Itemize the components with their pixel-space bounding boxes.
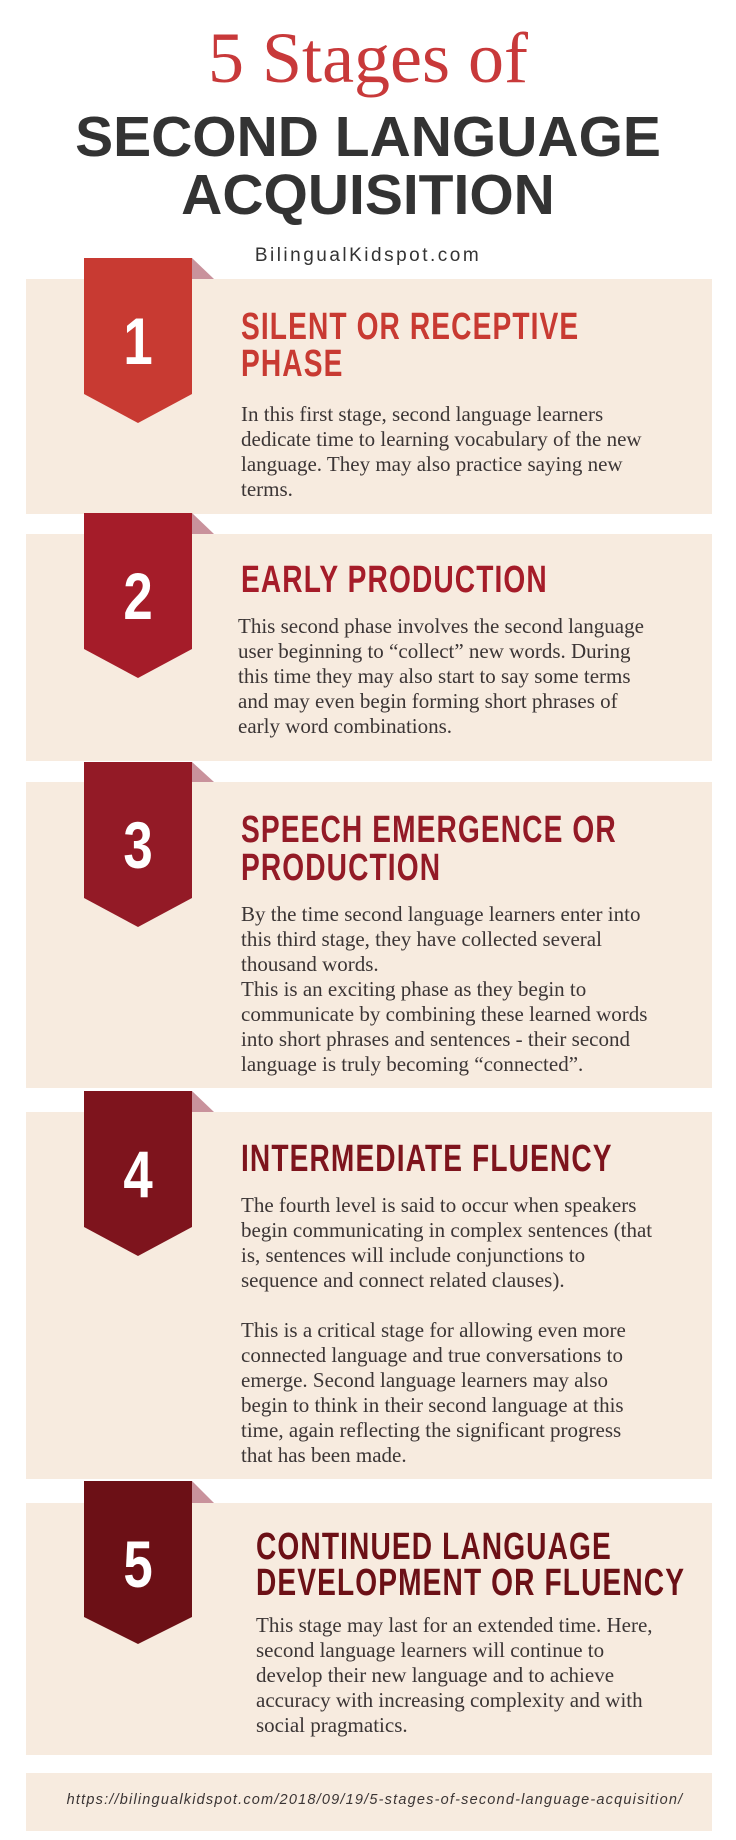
ribbon 1 bbox=[84, 258, 214, 423]
ribbon 3: 3 bbox=[123, 808, 153, 882]
ribbon 1: 1 bbox=[123, 304, 153, 378]
heading 4: INTERMEDIATE FLUENCY bbox=[241, 1138, 613, 1180]
title: second language acquisition: SECOND LANGUAGE bbox=[75, 105, 661, 169]
body 2: user beginning to “collect” new words. During bbox=[238, 639, 630, 663]
body 5: develop their new language and to achieve bbox=[256, 1663, 614, 1687]
ribbon 5 bbox=[84, 1481, 214, 1644]
body 3: into short phrases and sentences - their second bbox=[241, 1027, 630, 1051]
heading 3 bbox=[241, 809, 617, 889]
body 1: terms. bbox=[241, 477, 293, 501]
panel: stage 2 bbox=[26, 534, 712, 761]
ribbon 4 bbox=[84, 1091, 214, 1256]
heading 3: SPEECH EMERGENCE OR bbox=[241, 809, 617, 851]
body 5: This stage may last for an extended time. Here, bbox=[256, 1613, 653, 1637]
panel: stage 1 bbox=[26, 279, 712, 514]
body 4: connected language and true conversations to bbox=[241, 1343, 623, 1367]
body 5: social pragmatics. bbox=[256, 1713, 408, 1737]
body 4 bbox=[241, 1193, 652, 1467]
body 2 bbox=[238, 614, 644, 738]
body 5: second language learners will continue to bbox=[256, 1638, 604, 1662]
ribbon 5: 5 bbox=[123, 1527, 153, 1601]
body 2: this time they may also start to say some terms bbox=[238, 664, 631, 688]
ribbon 4: 4 bbox=[123, 1137, 153, 1211]
body 4: emerge. Second language learners may also bbox=[241, 1368, 608, 1392]
body 3: By the time second language learners enter into bbox=[241, 902, 640, 926]
body 2: early word combinations. bbox=[238, 714, 452, 738]
heading 1: SILENT OR RECEPTIVE bbox=[241, 306, 579, 348]
body 3 bbox=[241, 902, 647, 1076]
heading 5 bbox=[256, 1526, 685, 1604]
body 4: time, again reflecting the significant progress bbox=[241, 1418, 621, 1442]
heading 1: PHASE bbox=[241, 343, 343, 385]
body 4: begin communicating in complex sentences (that bbox=[241, 1218, 652, 1242]
body 3: communicate by combining these learned words bbox=[241, 1002, 647, 1026]
body 4: that has been made. bbox=[241, 1443, 407, 1467]
body 4: This is a critical stage for allowing even more bbox=[241, 1318, 626, 1342]
body 3: thousand words. bbox=[241, 952, 379, 976]
title: second language acquisition bbox=[75, 105, 661, 227]
body 1: language. They may also practice saying new bbox=[241, 452, 623, 476]
heading 1 bbox=[241, 306, 579, 385]
body 1: In this first stage, second language learners bbox=[241, 402, 603, 426]
body 1: dedicate time to learning vocabulary of the new bbox=[241, 427, 642, 451]
panel: stage 3 bbox=[26, 782, 712, 1088]
body 3: This is an exciting phase as they begin to bbox=[241, 977, 586, 1001]
body 4: begin to think in their second language at this bbox=[241, 1393, 624, 1417]
footer url text: https://bilingualkidspot.com/2018/09/19/5-stages-of-second-language-acquisition/ bbox=[67, 1792, 683, 1808]
panel: stage 5 bbox=[26, 1503, 712, 1755]
body 5: accuracy with increasing complexity and with bbox=[256, 1688, 643, 1712]
ribbon 2: 2 bbox=[123, 559, 153, 633]
body 2: and may even begin forming short phrases of bbox=[238, 689, 618, 713]
heading 5: CONTINUED LANGUAGE bbox=[256, 1526, 612, 1568]
body 4: sequence and connect related clauses). bbox=[241, 1268, 565, 1292]
body 2: This second phase involves the second language bbox=[238, 614, 644, 638]
site name: BilingualKidspot.com bbox=[255, 245, 481, 266]
ribbon 2 bbox=[84, 513, 214, 678]
body 5 bbox=[256, 1613, 653, 1737]
title: 5 Stages of: 5 Stages of bbox=[208, 18, 528, 98]
title: second language acquisition: ACQUISITION bbox=[181, 163, 555, 227]
heading 5: DEVELOPMENT OR FLUENCY bbox=[256, 1562, 685, 1604]
heading 3: PRODUCTION bbox=[241, 847, 441, 889]
ribbon 3 bbox=[84, 762, 214, 927]
body 3: language is truly becoming “connected”. bbox=[241, 1052, 583, 1076]
body 3: this third stage, they have collected several bbox=[241, 927, 602, 951]
body 1 bbox=[241, 402, 642, 501]
body 4: The fourth level is said to occur when speakers bbox=[241, 1193, 636, 1217]
heading 2: EARLY PRODUCTION bbox=[241, 559, 548, 601]
panel: footer url bbox=[26, 1773, 712, 1831]
body 4: is, sentences will include conjunctions to bbox=[241, 1243, 585, 1267]
panel: stage 4 bbox=[26, 1112, 712, 1479]
